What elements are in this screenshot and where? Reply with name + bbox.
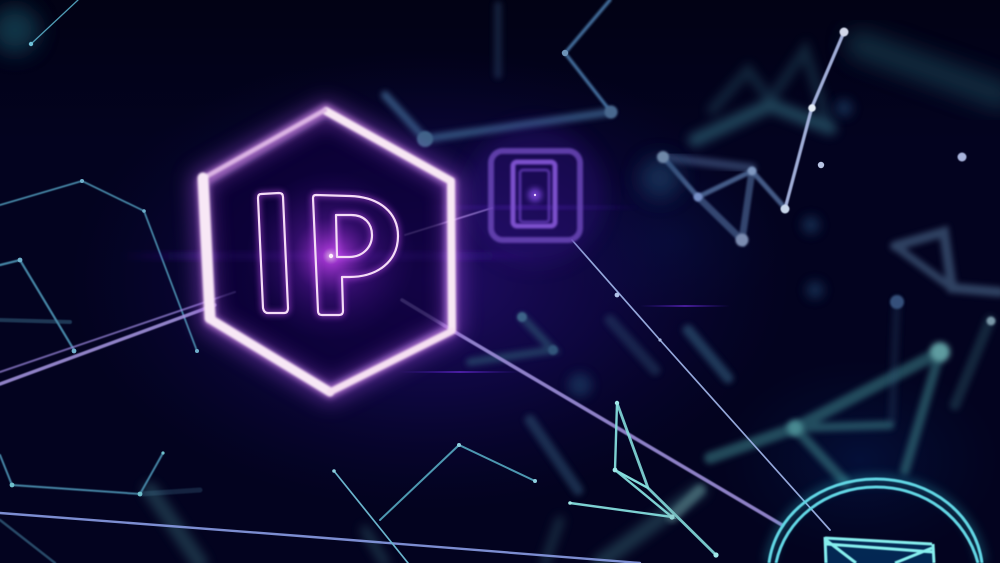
core glow — [246, 171, 416, 341]
icon: cyan circle with envelope — [769, 479, 982, 563]
hexagon interior dark fill — [212, 120, 443, 382]
envelope — [824, 537, 934, 563]
bright network: upper right — [417, 28, 996, 436]
letter I — [258, 193, 288, 313]
hexagon outline — [202, 110, 452, 392]
icon: glowing IP hexagon — [200, 110, 453, 394]
line: bottom centre — [332, 443, 537, 563]
blurred background network: top and centre — [0, 0, 853, 397]
teal triangle network — [568, 401, 719, 558]
network lines: left side — [0, 0, 200, 563]
icon: small purple square — [465, 125, 605, 265]
beam: square to circle — [572, 240, 830, 530]
beam: hexagon to circle — [402, 300, 782, 525]
hexagon glow — [200, 110, 453, 394]
beam: hexagon to square — [405, 208, 492, 235]
beam: left of hexagon — [0, 292, 235, 384]
blurred background network: right side — [150, 45, 1000, 563]
connection beams — [0, 208, 830, 563]
beam: bottom long line — [0, 513, 640, 563]
lens flare — [329, 254, 333, 258]
horizontal light streak — [120, 205, 730, 373]
letter P — [313, 195, 398, 315]
